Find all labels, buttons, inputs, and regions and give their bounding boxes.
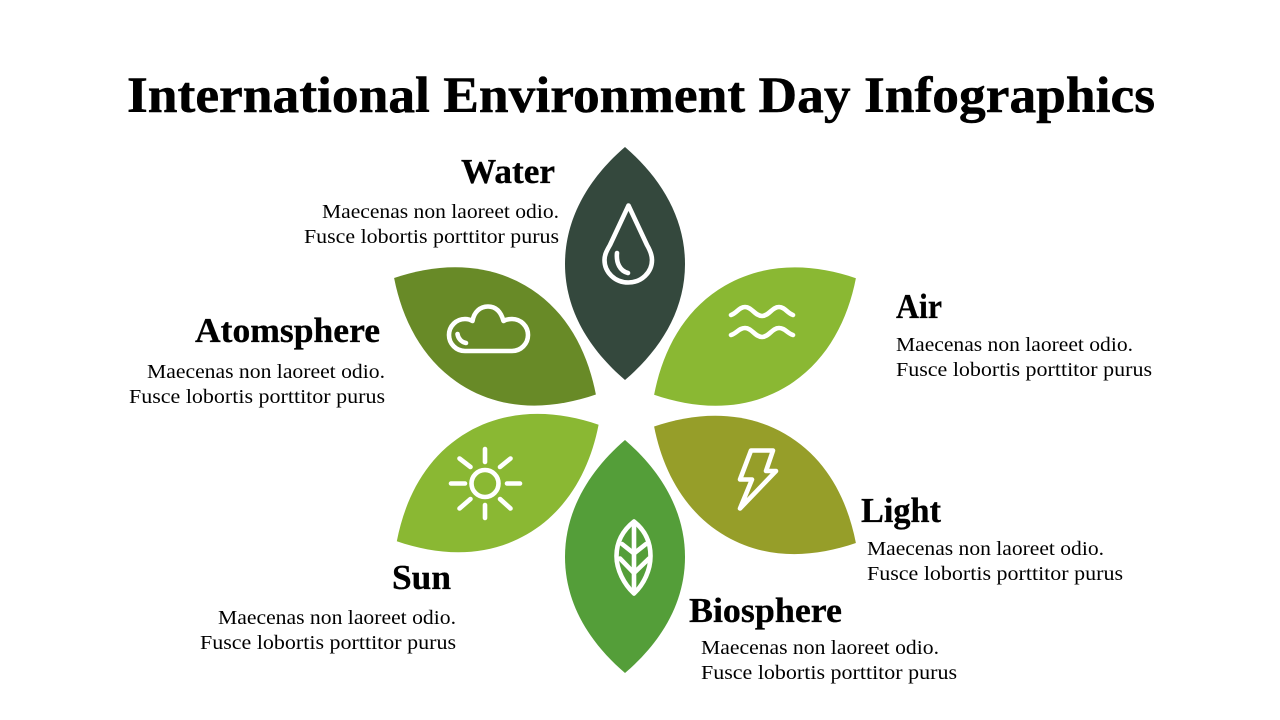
- text block: light: [861, 491, 1123, 585]
- heading: water: Water: [461, 152, 555, 191]
- icon: leaf: [616, 522, 650, 594]
- icon: cloud: [449, 306, 528, 351]
- text block: biosphere: [689, 591, 957, 684]
- leaf shape: biosphere: [565, 440, 685, 673]
- text block: air: [896, 287, 1152, 381]
- description: light: Maecenas non laoreet odio.: [867, 538, 1104, 560]
- icon: sun: [451, 449, 520, 518]
- petal: biosphere: [565, 440, 685, 673]
- text block: atmosphere: [129, 311, 385, 408]
- description: biosphere: [701, 637, 957, 684]
- description: water: Maecenas non laoreet odio.: [322, 201, 559, 223]
- leaf shape: sun: [367, 374, 628, 592]
- text block: water: [304, 152, 559, 248]
- heading: atmosphere: Atomsphere: [195, 311, 380, 350]
- text block: sun: [200, 558, 456, 654]
- heading: air: Air: [896, 287, 942, 326]
- description: sun: Maecenas non laoreet odio.: [218, 607, 456, 629]
- description: sun: [200, 607, 456, 654]
- heading: sun: Sun: [392, 558, 451, 597]
- petal: sun: [367, 374, 628, 592]
- leaf shape: light: [625, 375, 885, 594]
- icon: water drop: [604, 206, 652, 283]
- heading: biosphere: Biosphere: [689, 591, 842, 630]
- description: light: Fusce lobortis porttitor purus: [867, 563, 1123, 585]
- title: International Environment Day Infographics: [127, 68, 1155, 124]
- leaf shape: water: [565, 147, 685, 380]
- petal: air: [625, 227, 885, 446]
- leaf shape: air: [625, 227, 885, 446]
- description: atmosphere: [129, 361, 385, 408]
- description: air: Fusce lobortis porttitor purus: [896, 359, 1152, 381]
- description: atmosphere: Maecenas non laoreet odio.: [147, 361, 385, 383]
- description: biosphere: Fusce lobortis porttitor purus: [701, 662, 957, 684]
- description: biosphere: Maecenas non laoreet odio.: [701, 637, 939, 659]
- heading: light: Light: [861, 491, 941, 530]
- leaf shape: atmosphere: [365, 227, 625, 446]
- description: sun: Fusce lobortis porttitor purus: [200, 632, 456, 654]
- description: water: Fusce lobortis porttitor purus: [304, 226, 559, 248]
- petal: water: [565, 147, 685, 380]
- icon: lightning bolt: [740, 450, 776, 508]
- description: air: [896, 334, 1152, 381]
- petal: light: [625, 375, 885, 594]
- icon: air waves: [731, 307, 793, 337]
- description: atmosphere: Fusce lobortis porttitor purus: [129, 386, 385, 408]
- description: air: Maecenas non laoreet odio.: [896, 334, 1133, 356]
- petal: atmosphere: [365, 227, 625, 446]
- description: light: [867, 538, 1123, 585]
- description: water: [304, 201, 559, 248]
